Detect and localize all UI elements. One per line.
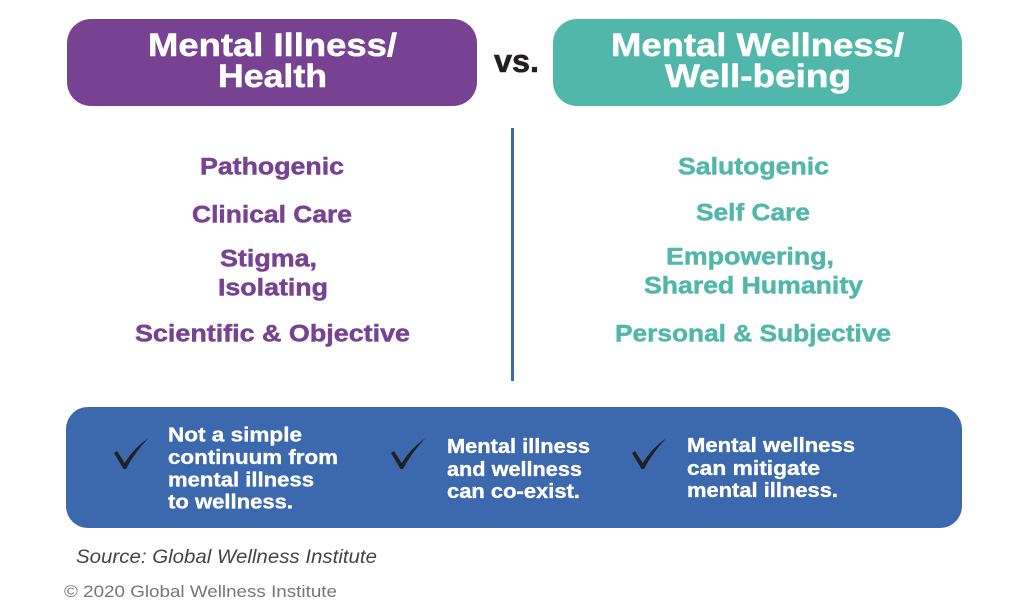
list: mental illness traits: Clinical Care <box>192 201 352 228</box>
takeaway 1: continuum from <box>168 447 338 469</box>
takeaway 1: Not a simple <box>168 424 302 446</box>
panel: mental illness header: Health <box>218 58 327 94</box>
panel: key takeaways <box>66 407 962 528</box>
panel: mental illness header: Mental Illness/ <box>148 27 397 63</box>
list: mental wellness traits: Self Care <box>696 200 810 226</box>
takeaway 2: Mental illness <box>447 436 590 458</box>
takeaway 1 <box>168 424 338 514</box>
panel: mental wellness header: Well-being <box>665 58 851 94</box>
takeaway 3: Mental wellness <box>687 435 855 457</box>
list: mental wellness traits: Salutogenic <box>678 154 829 181</box>
center divider <box>511 128 514 381</box>
takeaway 2 <box>447 436 590 503</box>
list: mental wellness traits: Shared Humanity <box>644 272 863 299</box>
list: mental wellness traits: Personal & Subjective <box>615 320 891 348</box>
list: mental illness traits: Stigma, <box>220 245 317 272</box>
takeaway 1: to wellness. <box>168 492 293 514</box>
takeaway 2: and wellness <box>447 459 582 481</box>
takeaway 3: mental illness. <box>687 480 838 502</box>
panel: mental wellness header: Mental Wellness/ <box>611 27 904 63</box>
panel: mental illness header <box>67 19 477 106</box>
list: mental illness traits <box>135 154 410 348</box>
list: mental illness traits: Scientific & Objective <box>135 320 410 348</box>
icon: check mark 2 <box>391 438 426 469</box>
takeaway 1: mental illness <box>168 470 314 492</box>
takeaway 3: can mitigate <box>687 458 820 480</box>
icon: check mark 1 <box>114 438 148 469</box>
icon: check mark 3 <box>632 438 666 469</box>
copyright: © 2020 Global Wellness Institute <box>64 583 337 601</box>
panel: mental wellness header <box>553 19 962 106</box>
list: mental wellness traits: Empowering, <box>666 243 834 270</box>
source note: Source: Global Wellness Institute <box>76 547 377 568</box>
list: mental illness traits: Isolating <box>218 274 328 301</box>
takeaway 3 <box>687 435 855 502</box>
takeaway 2: can co-exist. <box>447 481 580 503</box>
list: mental wellness traits <box>615 154 891 348</box>
list: mental illness traits: Pathogenic <box>200 154 344 181</box>
vs label: vs. <box>494 43 539 79</box>
